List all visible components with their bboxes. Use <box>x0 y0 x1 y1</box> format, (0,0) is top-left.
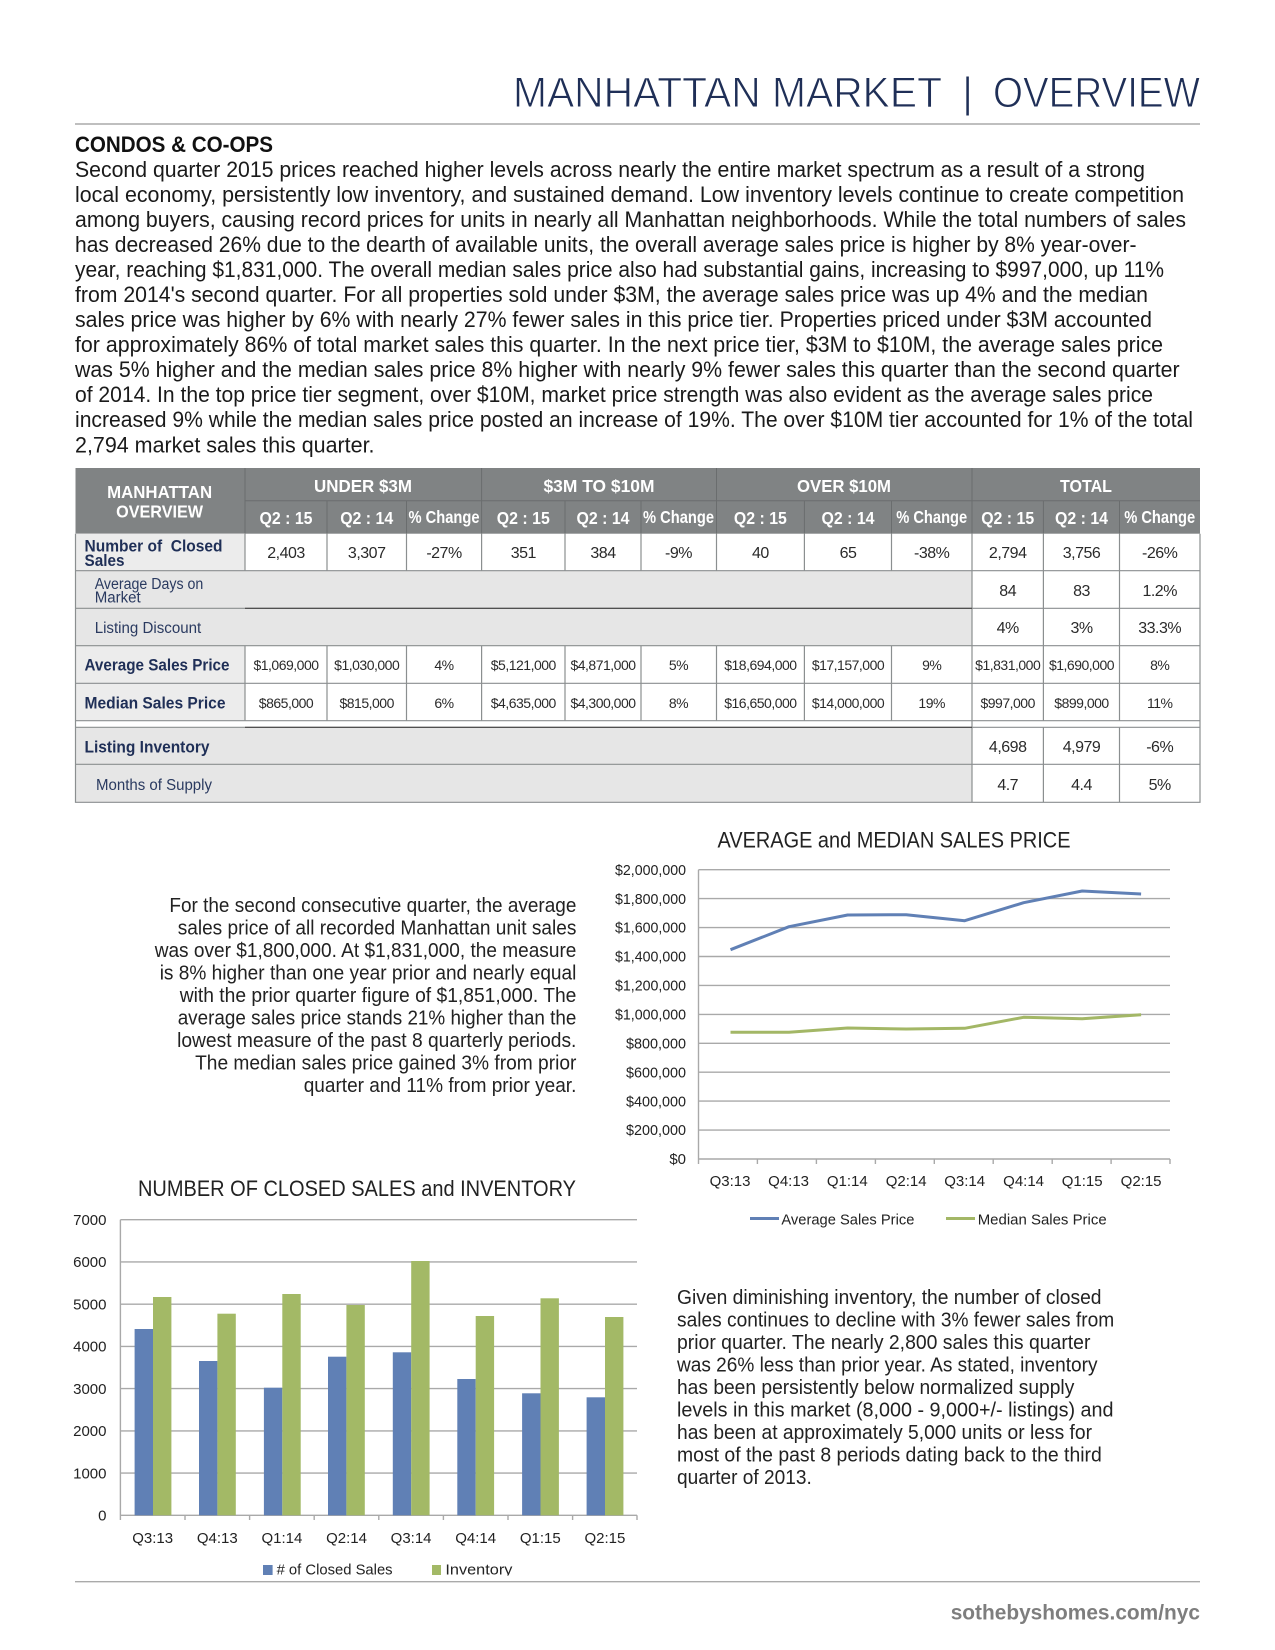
row: median sales price: $899,000 <box>1054 695 1109 711</box>
commentary: average sales price: sales price of all recorded Manhattan unit sales <box>178 916 576 940</box>
heading: condos and co-ops: CONDOS & CO-OPS <box>75 132 273 157</box>
table header band: Q2 : 15 <box>734 508 787 528</box>
commentary: closed sales and inventory: Given diminishing inventory, the number of closed <box>677 1286 1102 1309</box>
row: listing inventory: 4,698 <box>989 739 1027 756</box>
commentary: average sales price: quarter and 11% from prior year. <box>304 1074 576 1097</box>
table header band: % Change <box>643 507 714 527</box>
table header band: Q2 : 14 <box>1055 508 1108 528</box>
y axis labels: 3000 <box>73 1381 106 1398</box>
x axis labels <box>132 1530 625 1547</box>
x axis labels: Q1:15 <box>520 1530 561 1547</box>
row: number of closed sales: 3,756 <box>1063 545 1101 562</box>
y axis labels: 1000 <box>73 1466 106 1482</box>
table header band: % Change <box>408 507 480 527</box>
legend: Average Sales Price <box>781 1212 914 1228</box>
intro text block: for approximately 86% of total market sales this quarter. In the next price tier, $3M to $10M, the average sales price <box>75 332 1163 357</box>
commentary: closed sales and inventory: prior quarter. The nearly 2,800 sales this quarter <box>677 1331 1091 1354</box>
row: listing discount: 33.3% <box>1138 620 1181 637</box>
line: average sales price <box>730 891 1141 950</box>
row: number of closed sales: -26% <box>1142 545 1178 562</box>
x axis labels: Q3:14 <box>944 1173 985 1190</box>
row: average sales price: 5% <box>669 657 688 673</box>
row: average sales price: $5,121,000 <box>491 657 557 673</box>
row: average sales price: $17,157,000 <box>812 657 885 673</box>
y axis labels: 2000 <box>73 1423 106 1440</box>
row: average days on market <box>95 576 1177 606</box>
intro text block: year, reaching $1,831,000. The overall median sales price also had substantial gains, increasing to $997,000, up 11% <box>75 257 1164 282</box>
x axis labels: Q1:14 <box>827 1173 868 1190</box>
row: average sales price: $1,831,000 <box>975 657 1041 673</box>
commentary: closed sales and inventory: most of the past 8 periods dating back to the third <box>677 1444 1102 1466</box>
intro text block: from 2014's second quarter. For all properties sold under $3M, the average sales price was up 4% and the median <box>75 282 1148 307</box>
y axis labels: 6000 <box>73 1254 106 1271</box>
row: average days on market: Market <box>95 590 141 606</box>
legend: # of Closed Sales <box>277 1562 393 1578</box>
commentary: average sales price: is 8% higher than one year prior and nearly equal <box>160 962 576 984</box>
commentary: average sales price: was over $1,800,000. At $1,831,000, the measure <box>154 939 576 962</box>
row: median sales price: $815,000 <box>339 695 395 711</box>
commentary: closed sales and inventory: quarter of 2013. <box>677 1466 812 1489</box>
row: median sales price <box>84 694 1172 712</box>
intro text block <box>74 157 1193 457</box>
table header band: Q2 : 14 <box>576 508 630 528</box>
row: median sales price: 11% <box>1147 695 1172 711</box>
row: median sales price: $4,635,000 <box>491 695 557 711</box>
y axis labels: 4000 <box>73 1338 106 1356</box>
row: months of supply <box>96 777 1171 794</box>
row: number of closed sales: Sales <box>84 551 124 570</box>
commentary: average sales price: average sales price stands 21% higher than the <box>178 1006 576 1030</box>
row: number of closed sales: 2,794 <box>989 545 1027 562</box>
chart title: NUMBER OF CLOSED SALES and INVENTORY <box>138 1176 576 1201</box>
intro text block: 2,794 market sales this quarter. <box>75 432 374 457</box>
table header band: % Change <box>896 507 967 527</box>
row: listing discount: 3% <box>1070 620 1093 637</box>
intro text block: Second quarter 2015 prices reached higher levels across nearly the entire market spectrum as a result of a strong <box>75 157 1145 182</box>
row: average sales price <box>84 656 1169 674</box>
line: median sales price <box>730 1015 1141 1032</box>
title: OVERVIEW <box>993 69 1200 117</box>
row: listing inventory: -6% <box>1146 739 1173 756</box>
row: number of closed sales: 351 <box>511 545 536 562</box>
x axis labels: Q3:14 <box>391 1530 432 1547</box>
x axis labels: Q1:14 <box>261 1530 302 1547</box>
row: number of closed sales: 40 <box>752 545 769 562</box>
table header band: $3M TO $10M <box>544 476 654 496</box>
x axis labels: Q4:14 <box>1003 1173 1044 1190</box>
row: median sales price: $14,000,000 <box>812 695 885 711</box>
line chart: average and median sales price <box>615 828 1170 1228</box>
x axis labels: Q4:14 <box>455 1530 496 1547</box>
legend <box>750 1212 1107 1228</box>
y axis labels: $1,200,000 <box>615 978 686 994</box>
intro text block: was 5% higher and the median sales price 8% higher with nearly 9% fewer sales this quarter than the second quarter <box>74 357 1180 382</box>
x axis labels: Q3:13 <box>132 1530 173 1547</box>
row: average days on market: 84 <box>999 583 1017 600</box>
commentary: average sales price: For the second consecutive quarter, the average <box>169 894 576 917</box>
legend: Median Sales Price <box>978 1212 1107 1228</box>
y axis labels: $400,000 <box>626 1094 686 1110</box>
x axis labels: Q4:13 <box>197 1530 238 1547</box>
row: median sales price: 8% <box>669 695 688 711</box>
row: listing inventory <box>84 738 1173 756</box>
intro text block: has decreased 26% due to the dearth of available units, the overall average sales price is higher by 8% year-over- <box>75 232 1136 257</box>
y axis labels: $1,800,000 <box>615 891 686 908</box>
y axis labels: $1,400,000 <box>615 948 686 966</box>
row: listing discount: 4% <box>997 620 1019 637</box>
row: median sales price: 19% <box>918 695 945 711</box>
row: number of closed sales: Number of Closed <box>84 536 222 556</box>
table header band: OVERVIEW <box>116 502 204 522</box>
row: average days on market: 1.2% <box>1142 583 1177 600</box>
bars: closed sales <box>135 1329 605 1515</box>
row: months of supply: Months of Supply <box>96 777 212 794</box>
commentary: average sales price: with the prior quarter figure of $1,851,000. The <box>179 984 576 1007</box>
commentary: closed sales and inventory <box>676 1286 1114 1489</box>
table header band: Q2 : 14 <box>340 508 393 528</box>
x axis labels: Q1:15 <box>1062 1173 1103 1190</box>
row: listing discount: Listing Discount <box>95 620 202 637</box>
row: median sales price: $997,000 <box>980 695 1036 711</box>
row: average sales price: 8% <box>1150 657 1169 673</box>
row: average sales price: 9% <box>922 657 941 673</box>
legend <box>263 1562 520 1582</box>
y axis labels: 0 <box>98 1508 106 1524</box>
x axis labels <box>710 1173 1162 1190</box>
table header band: Q2 : 14 <box>822 508 875 528</box>
commentary: closed sales and inventory: has been at approximately 5,000 units or less for <box>677 1421 1092 1444</box>
y axis labels <box>615 862 686 1168</box>
bar chart: closed sales and inventory <box>73 1176 637 1582</box>
y axis labels: 5000 <box>73 1296 106 1314</box>
table header band: TOTAL <box>1060 476 1112 496</box>
y axis labels: $1,600,000 <box>615 920 686 936</box>
row: months of supply: 5% <box>1149 777 1171 794</box>
row: median sales price: $4,300,000 <box>570 695 636 711</box>
x axis labels: Q3:13 <box>710 1173 750 1190</box>
row: average sales price: $18,694,000 <box>724 657 797 673</box>
y axis labels: $1,000,000 <box>615 1006 686 1024</box>
commentary: closed sales and inventory: was 26% less than prior year. As stated, inventory <box>676 1354 1098 1376</box>
table header band: Q2 : 15 <box>497 508 550 528</box>
row: months of supply: 4.4 <box>1071 777 1092 794</box>
commentary: closed sales and inventory: has been persistently below normalized supply <box>677 1376 1075 1399</box>
row: average sales price: $1,690,000 <box>1049 657 1115 673</box>
row: median sales price: 6% <box>434 695 454 711</box>
row: months of supply: 4.7 <box>997 777 1019 794</box>
row: number of closed sales: -27% <box>426 545 462 562</box>
table row backgrounds <box>76 534 1200 802</box>
x axis labels: Q2:14 <box>886 1173 927 1190</box>
table header band: % Change <box>1124 507 1195 527</box>
bars: inventory <box>153 1261 623 1515</box>
title: MANHATTAN MARKET <box>513 69 942 117</box>
y axis labels <box>73 1212 106 1524</box>
table header band: UNDER $3M <box>314 476 412 496</box>
row: number of closed sales <box>84 536 1178 570</box>
x axis labels: Q4:13 <box>768 1173 809 1190</box>
table header band: Q2 : 15 <box>981 508 1034 528</box>
commentary: average sales price: lowest measure of the past 8 quarterly periods. <box>177 1029 576 1052</box>
commentary: closed sales and inventory: levels in this market (8,000 - 9,000+/- listings) and <box>677 1398 1114 1422</box>
row: listing inventory: 4,979 <box>1063 739 1101 756</box>
row: listing discount <box>95 620 1181 637</box>
intro text block: of 2014. In the top price tier segment, over $10M, market price strength was also evident as the average sales price <box>75 382 1153 407</box>
row: average sales price: $1,030,000 <box>334 657 400 673</box>
table header band: OVER $10M <box>797 476 891 496</box>
y axis labels: $600,000 <box>626 1064 686 1082</box>
commentary: average sales price: The median sales price gained 3% from prior <box>195 1052 577 1074</box>
y axis labels: $2,000,000 <box>615 862 686 879</box>
row: average sales price: $1,069,000 <box>253 657 319 673</box>
intro text block: local economy, persistently low inventory, and sustained demand. Low inventory levels continue to create competition <box>75 182 1184 207</box>
intro text block: increased 9% while the median sales price posted an increase of 19%. The over $10M tier accounted for 1% of the total <box>75 407 1193 432</box>
y axis labels: $800,000 <box>626 1036 686 1052</box>
x axis labels: Q2:14 <box>326 1530 367 1547</box>
table header band: MANHATTAN <box>107 482 212 502</box>
legend: Inventory <box>445 1562 513 1578</box>
row: median sales price: $16,650,000 <box>724 695 797 711</box>
row: average sales price: $4,871,000 <box>570 657 636 673</box>
row: median sales price: $865,000 <box>259 695 314 711</box>
x axis labels: Q2:15 <box>584 1530 625 1547</box>
x axis labels: Q2:15 <box>1121 1173 1162 1190</box>
table header band <box>76 468 1200 534</box>
row: number of closed sales: 384 <box>590 545 616 562</box>
row: listing inventory: Listing Inventory <box>84 738 210 756</box>
row: number of closed sales: -9% <box>665 545 692 562</box>
y axis labels: $200,000 <box>626 1122 686 1139</box>
row: average days on market: 83 <box>1073 583 1090 600</box>
table header band: Q2 : 15 <box>260 508 313 528</box>
row: number of closed sales: 2,403 <box>267 545 305 562</box>
footer url: sothebyshomes.com/nyc <box>951 1601 1200 1624</box>
row: number of closed sales: 65 <box>840 545 857 562</box>
row: median sales price: Median Sales Price <box>84 694 226 712</box>
commentary: closed sales and inventory: sales continues to decline with 3% fewer sales from <box>677 1308 1114 1332</box>
intro text block: sales price was higher by 6% with nearly 27% fewer sales in this price tier. Properties priced under $3M accounted <box>75 307 1152 332</box>
intro text block: among buyers, causing record prices for units in nearly all Manhattan neighborhoods. While the total numbers of sales <box>75 207 1186 232</box>
title <box>75 69 1200 124</box>
commentary: average sales price <box>154 894 577 1097</box>
y axis labels: $0 <box>669 1151 686 1168</box>
y axis labels: 7000 <box>73 1212 106 1229</box>
footer rule <box>75 1581 1200 1583</box>
overview table <box>76 468 1200 802</box>
row: number of closed sales: -38% <box>914 545 950 562</box>
chart title: AVERAGE and MEDIAN SALES PRICE <box>718 828 1070 853</box>
row: average sales price: 4% <box>434 657 454 673</box>
row: number of closed sales: 3,307 <box>348 545 386 562</box>
title: | <box>962 69 973 117</box>
row: average sales price: Average Sales Price <box>84 656 230 674</box>
row: average days on market: Average Days on <box>95 576 203 593</box>
